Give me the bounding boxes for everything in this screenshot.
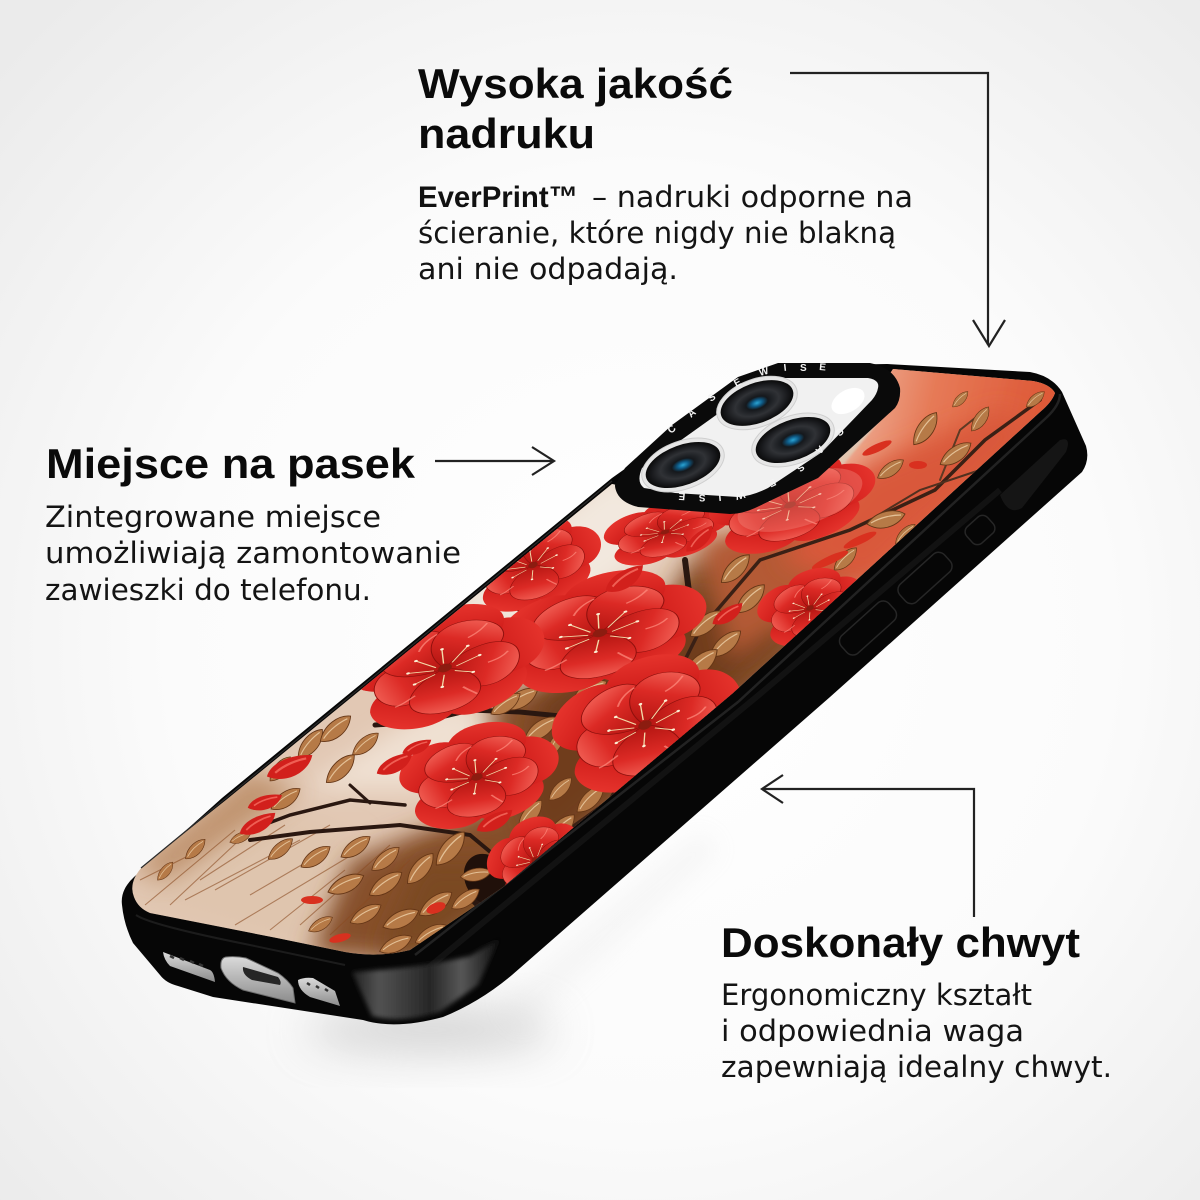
heading: print quality bbox=[418, 60, 733, 157]
ring branding: bottom: CASEWISE bbox=[678, 425, 846, 502]
flash bbox=[827, 382, 869, 420]
phone shadow bbox=[305, 830, 720, 1052]
streaks bbox=[140, 825, 410, 935]
orange top right bbox=[840, 369, 1055, 583]
arrow: print quality bbox=[790, 73, 1005, 346]
artwork bbox=[132, 369, 1055, 955]
heading: print quality: nadruku bbox=[418, 110, 595, 157]
salmon tint on upper flower bbox=[738, 468, 862, 532]
side buttons bbox=[836, 512, 998, 658]
body: grip: i odpowiednia waga bbox=[721, 1014, 1024, 1048]
heading: strap: Miejsce na pasek bbox=[46, 440, 416, 487]
art rim line bbox=[141, 481, 612, 868]
body: print quality: EverPrint™ bbox=[418, 181, 578, 214]
body: grip bbox=[721, 978, 1112, 1084]
leaves centre bbox=[526, 716, 556, 738]
lens left bbox=[634, 428, 732, 502]
side switch bbox=[1000, 439, 1068, 510]
arrow: strap bbox=[435, 447, 554, 475]
body: print quality bbox=[418, 180, 913, 286]
body: grip: Ergonomiczny kształt bbox=[721, 978, 1032, 1012]
body: strap: Zintegrowane miejsce bbox=[45, 500, 381, 534]
heading: print quality: Wysoka jakość bbox=[418, 60, 733, 107]
small red marks bbox=[301, 438, 927, 945]
body: print quality: ścieranie, które nigdy nie blakną bbox=[418, 216, 896, 250]
body: print quality: – nadruki odporne na bbox=[592, 180, 913, 214]
lens top bbox=[709, 366, 805, 440]
text block: grip bbox=[721, 919, 1112, 1084]
ring branding: top: CASEWISE bbox=[666, 362, 827, 436]
text block: strap bbox=[45, 440, 461, 607]
dark patch bbox=[464, 854, 510, 902]
body: grip: zapewniają idealny chwyt. bbox=[721, 1050, 1112, 1084]
camera island bbox=[615, 362, 900, 514]
side edge highlight bbox=[415, 394, 1060, 955]
body: strap: zawieszki do telefonu. bbox=[45, 573, 371, 607]
lens right bbox=[744, 403, 842, 477]
arrow: grip bbox=[762, 775, 974, 917]
leaves upper right bbox=[913, 412, 938, 446]
charging port bbox=[221, 957, 295, 1003]
brown band bbox=[310, 530, 890, 960]
buds bbox=[606, 565, 643, 592]
phone case bbox=[100, 340, 1100, 1024]
flowers bbox=[482, 520, 601, 612]
body: strap: umożliwiają zamontowanie bbox=[45, 536, 461, 570]
case body bbox=[122, 364, 1087, 1024]
camera window bbox=[639, 378, 878, 497]
tan lower-left bbox=[132, 892, 318, 946]
body: print quality: ani nie odpadają. bbox=[418, 252, 678, 286]
speaker right bbox=[298, 978, 340, 1006]
body: strap bbox=[45, 500, 461, 607]
leaves lower left bbox=[270, 788, 300, 810]
speaker left bbox=[163, 952, 215, 982]
heading: grip: Doskonały chwyt bbox=[721, 919, 1080, 966]
branches bbox=[250, 400, 1040, 905]
glossy corner bbox=[352, 938, 500, 1019]
text block: print quality bbox=[418, 60, 913, 286]
cream area bbox=[450, 484, 664, 618]
